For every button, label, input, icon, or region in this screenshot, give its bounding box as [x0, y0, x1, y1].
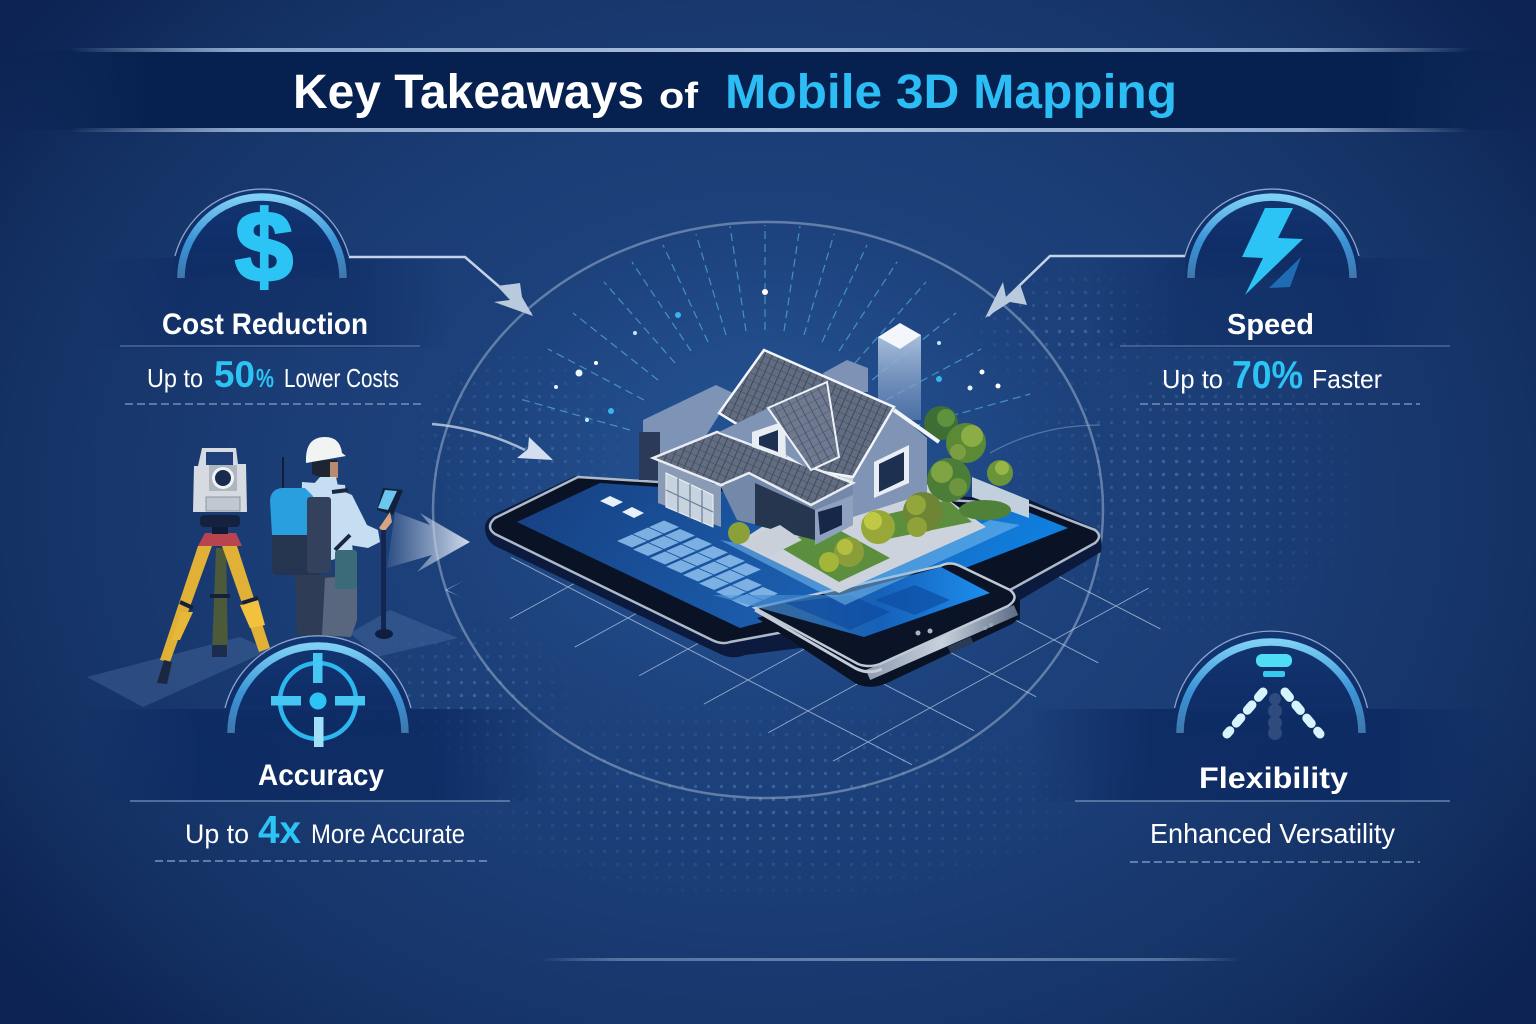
large scan ring	[433, 222, 1103, 798]
illustration: surveyor with backpack	[270, 437, 403, 639]
back phone screen	[517, 483, 1068, 628]
central glow	[438, 200, 1098, 740]
heading: speed: Speed	[1227, 309, 1314, 341]
icon: lightning bolt	[1242, 208, 1303, 295]
stat: up to 70% faster: 70%	[1232, 354, 1303, 397]
scan points	[554, 289, 1000, 422]
panel: accuracy	[80, 636, 550, 861]
stat: up to 4x more accurate: More Accurate	[311, 819, 465, 849]
stat: up to 50% lower costs: Lower Costs	[284, 363, 399, 393]
roofs	[719, 350, 894, 477]
icon: crosshair target	[271, 653, 365, 747]
heading: cost reduction: Cost Reduction	[162, 308, 368, 341]
rear building	[643, 385, 733, 470]
fence and hedge	[972, 477, 1029, 518]
lawn	[776, 525, 890, 582]
arrow: curved middle	[432, 424, 553, 460]
panel: flexibility	[1020, 631, 1510, 862]
trees	[924, 406, 1013, 502]
stat: enhanced versatility: Enhanced Versatility	[1150, 818, 1395, 849]
chimney	[878, 335, 921, 420]
stat: up to 4x more accurate: Up to	[185, 819, 249, 849]
illustration: back phone	[485, 476, 1102, 657]
porch	[755, 483, 815, 540]
arrow: top left	[494, 283, 533, 316]
halftone dot texture	[395, 278, 1321, 879]
title text: of	[659, 75, 699, 116]
house base plinth	[720, 520, 1020, 605]
stat: up to 50% lower costs: Up to	[147, 363, 203, 393]
icon: dollar sign: $	[235, 191, 293, 303]
illustration: total station on tripod	[157, 448, 270, 684]
heading: flexibility: Flexibility	[1199, 762, 1348, 795]
isometric floor grid	[445, 557, 1161, 765]
icon: scanner tripod	[1227, 654, 1320, 740]
title text: Key Takeaways	[293, 66, 644, 119]
panel: speed	[988, 189, 1460, 404]
front phone screen	[713, 567, 990, 637]
illustration: front phone	[713, 564, 1020, 687]
heading: accuracy: Accuracy	[258, 759, 384, 792]
house walls	[853, 410, 927, 517]
title band	[0, 48, 1536, 132]
arrow: surveyor to phones	[387, 512, 470, 572]
stat: up to 4x more accurate: 4x	[258, 809, 301, 852]
stat: up to 70% faster: Faster	[1312, 364, 1382, 394]
bushes	[728, 492, 943, 572]
title text: Mobile 3D Mapping	[725, 66, 1177, 119]
floor tiles on screen	[617, 520, 778, 607]
arrow: top right	[985, 282, 1027, 318]
panel: cost reduction	[90, 189, 531, 404]
scan rays	[520, 225, 1100, 453]
stat: up to 50% lower costs: %	[256, 363, 274, 393]
stat: up to 70% faster: Up to	[1162, 364, 1223, 394]
ground tiles under surveyor	[87, 610, 458, 707]
stat: up to 50% lower costs: 50	[214, 354, 255, 395]
illustration: 3D house model	[639, 323, 1029, 605]
